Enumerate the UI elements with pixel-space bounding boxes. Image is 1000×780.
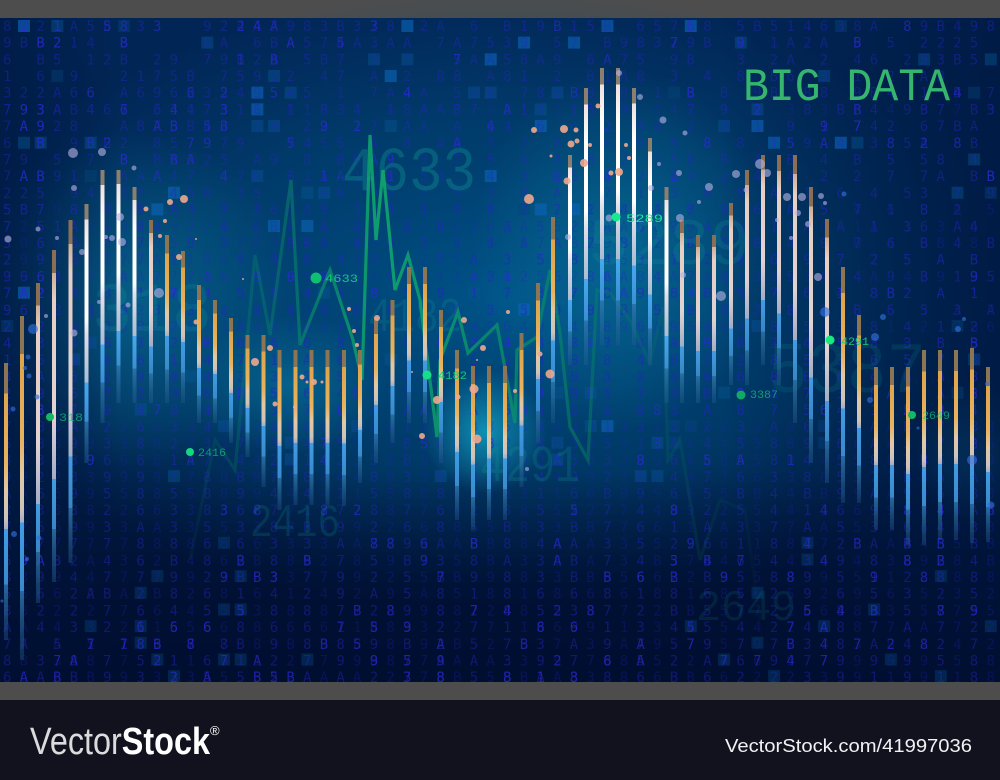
label: 3387 xyxy=(736,390,778,402)
matrix digits: bright layer: B2 B A 5 7 9 B xyxy=(3,36,1000,52)
scatter dots: blue xyxy=(0,192,994,602)
numeral: 4633: 4633 xyxy=(342,138,476,209)
matrix digits: bright layer: B 6 5 4 A 9 8 B 5 xyxy=(3,336,1000,352)
label: 4291 xyxy=(826,336,869,349)
matrix digits: main layer: 5B7 8 9 5 A4 7 36 A5 1 9 1 5 B 2 7 2 4 A 8 9 6 A 5 7 1 B 2 xyxy=(3,203,970,219)
label: 2416 xyxy=(186,448,226,460)
matrix digits: bright layer: 3 7 8 A 9 8 6 5 3 xyxy=(3,403,953,419)
numeral: 5387: 5387 xyxy=(768,332,926,414)
green line chart xyxy=(190,135,760,620)
matrix digits: bright layer: 93 6 4 3 A 2 B 3 xyxy=(3,102,1000,118)
scatter dots: lavender xyxy=(4,70,827,471)
large faded numerals xyxy=(92,138,926,634)
matrix digits: bright layer: 9 B3 7 B 6 B 9 8 9 8 xyxy=(3,570,986,586)
label: 2649: 2649 xyxy=(922,411,950,423)
matrix digits: bright layer: 7 78B 8 B 5 A B A 7 B 4 7 2 8 xyxy=(3,637,936,653)
label: 318 xyxy=(46,413,83,425)
matrix digits: bright layer: 6 6 2 5 4 B B 4 xyxy=(3,86,1000,102)
title: BIG DATA: BIG DATA xyxy=(743,62,950,114)
numeral: 318: 318 xyxy=(92,274,212,353)
label: 5289 xyxy=(612,212,663,226)
watermark logo: ® xyxy=(210,723,220,738)
label: 4182: 4182 xyxy=(438,371,467,383)
watermark url: VectorStock.com/41997036 xyxy=(725,735,972,756)
matrix digits: bright layer: 5 B 8 7 4 2 8 5 4 B 8 9 xyxy=(3,603,1000,619)
matrix digits: bright layer: 7A 2 7 A 9 5 9 2 6 A 7 7 4 7 xyxy=(3,654,836,670)
numeral: 5289: 5289 xyxy=(588,209,750,284)
label: 2649 xyxy=(908,411,950,423)
matrix digits: dense faint layer xyxy=(3,102,1000,686)
matrix digits: bright layer: 9 A 4 A 8 5 A 1 B xyxy=(3,453,1000,469)
label: 4633: 4633 xyxy=(325,274,358,286)
matrix digits: bright layer: A B 2 A B5B 3 8 8 1 8 xyxy=(3,670,720,686)
watermark logo: VectorStock xyxy=(30,721,211,763)
label: 5289: 5289 xyxy=(626,214,663,226)
bar chart: vertical bars xyxy=(4,68,990,660)
matrix digits: bright layer: 9A B B 9 A 3 B 7 4 8 B xyxy=(3,553,970,569)
numeral: 2649: 2649 xyxy=(696,584,796,634)
matrix digits: bright layer: 6 6 6 7 5 9 8 6 5 7 A xyxy=(3,620,903,636)
matrix digits: bright layer: A9 AB 5B 9 2 4 2 9 7 xyxy=(3,119,936,135)
label: 318: 318 xyxy=(59,413,83,425)
numeral: 4291: 4291 xyxy=(480,438,580,497)
data point labels xyxy=(46,212,950,460)
scatter dots: salmon xyxy=(144,104,631,444)
numeral: 2416: 2416 xyxy=(250,498,340,550)
label: 4182 xyxy=(422,370,467,383)
numeral: 4182: 4182 xyxy=(368,292,462,346)
label: 4633 xyxy=(310,272,358,286)
label: 2416: 2416 xyxy=(198,448,226,460)
label: 3387: 3387 xyxy=(750,390,778,402)
label: 4291: 4291 xyxy=(841,337,869,349)
